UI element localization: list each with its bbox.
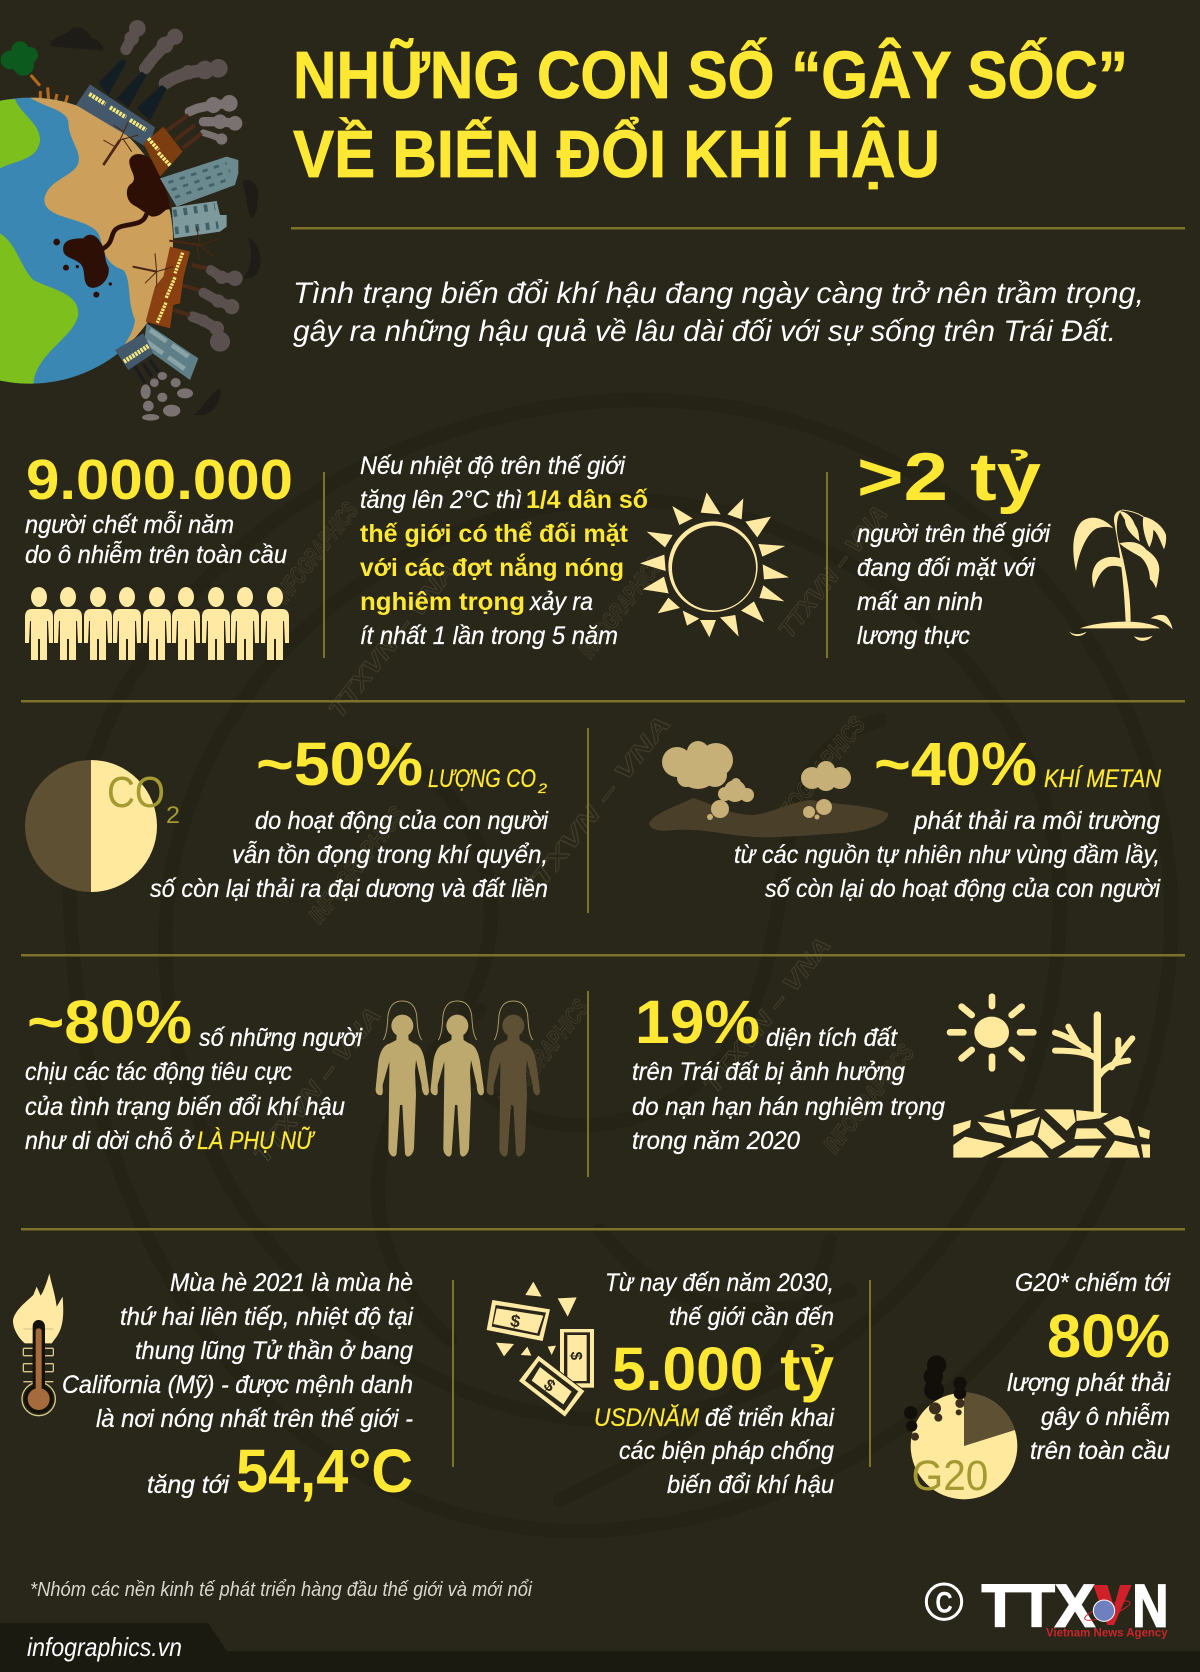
stat: ~80% women: của tình trạng biến đổi khí hậu xyxy=(25,1093,345,1121)
stat: ~80% women xyxy=(25,988,363,1155)
watermarks: INFOGRAPHICS xyxy=(573,553,669,664)
stat: heatwaves xyxy=(360,452,648,650)
stat: 5.000 billion USD: các biện pháp chống xyxy=(619,1437,834,1465)
lower orange factory xyxy=(146,247,190,328)
stat: 9.000.000 deaths: do ô nhiễm trên toàn cầu xyxy=(25,540,287,569)
stat: heatwaves: ít nhất 1 lần trong 5 năm xyxy=(360,622,618,650)
icon: money bills: $ xyxy=(509,1310,522,1332)
stat: ~40% methane xyxy=(734,730,1162,903)
stat: ~50% CO2: số còn lại thải ra đại dương và đất liền xyxy=(150,875,548,903)
stat: >2 billion food insecurity xyxy=(857,439,1051,650)
stat: 5.000 billion USD: Từ nay đến năm 2030, xyxy=(605,1269,834,1297)
stat: heatwaves: nghiêm trọng xyxy=(360,588,525,616)
stat: 9.000.000 deaths: người chết mỗi năm xyxy=(25,510,234,539)
dead trees xyxy=(103,122,220,287)
title xyxy=(293,37,1128,192)
chart: G20 pie with smoke xyxy=(904,1355,1017,1500)
stat: 5.000 billion USD: thế giới cần đến xyxy=(669,1303,834,1331)
stat: 54.4°C Death Valley: thứ hai liên tiếp, nhiệt độ tại xyxy=(120,1303,414,1331)
stat: >2 billion food insecurity: lương thực xyxy=(857,622,970,650)
stat: 5.000 billion USD xyxy=(594,1269,835,1499)
icon: thermometer with flame xyxy=(13,1273,63,1416)
stat: >2 billion food insecurity: đang đối mặt với xyxy=(857,554,1036,582)
earth xyxy=(0,93,187,387)
stat: heatwaves: xảy ra xyxy=(529,588,593,616)
logo: TTXVN: TTX xyxy=(982,1572,1095,1640)
stat: 54.4°C Death Valley: tăng tới xyxy=(147,1471,230,1499)
stat: G20 80%: 80% xyxy=(1047,1302,1170,1370)
grey buildings xyxy=(160,157,238,207)
footer band xyxy=(0,1623,1200,1672)
stat: 5.000 billion USD: biến đổi khí hậu xyxy=(667,1471,834,1499)
chart: CO2 half circle: 2 xyxy=(166,802,180,829)
stat: 19% drought: trong năm 2020 xyxy=(632,1127,800,1155)
source: infographics.vn xyxy=(27,1632,182,1662)
stat: >2 billion food insecurity: >2 tỷ xyxy=(857,439,1041,515)
stat: 19% drought: trên Trái đất bị ảnh hưởng xyxy=(632,1058,905,1086)
stat: 5.000 billion USD: USD/NĂM xyxy=(594,1403,699,1432)
watermarks: TTXVN – VNA xyxy=(698,932,837,1099)
dark clouds xyxy=(50,27,260,415)
watermarks: INFOGRAPHICS xyxy=(268,498,364,609)
stat: 54.4°C Death Valley: 54,4°C xyxy=(236,1437,413,1505)
watermarks: INFOGRAPHICS xyxy=(763,712,871,839)
stat: ~50% CO2: ~50% xyxy=(256,730,423,798)
logo: TTXVN: N xyxy=(1132,1572,1168,1640)
logo: TTXVN: C xyxy=(935,1586,953,1619)
stat: 54.4°C Death Valley: Mùa hè 2021 là mùa hè xyxy=(170,1269,413,1297)
watermarks: TTXVN – VNA xyxy=(248,1002,387,1169)
background swirl decoration xyxy=(70,400,1171,1531)
icon: drought sun, dead tree and cracked earth xyxy=(950,997,1150,1158)
stat: ~40% methane: KHÍ METAN xyxy=(1044,764,1162,793)
top factory xyxy=(76,84,155,148)
watermarks: TTXVN – VNA xyxy=(513,711,676,909)
stat: ~40% methane: từ các nguồn tự nhiên như vùng đầm lầy, xyxy=(734,841,1160,869)
logo: TTXVN: Vietnam News Agency xyxy=(1046,1626,1168,1640)
stat: 19% drought: 19% xyxy=(635,988,760,1056)
watermarks: TTXVN – VNA xyxy=(773,501,893,644)
watermarks: INFOGRAPHICS xyxy=(818,1040,920,1159)
orange factory xyxy=(143,127,183,177)
icon: swamp with methane clouds xyxy=(649,741,888,837)
stat: 9.000.000 deaths: 9.000.000 xyxy=(26,448,293,512)
intro text: gây ra những hậu quả về lâu dài đối với sự sống trên Trái Đất. xyxy=(293,315,1116,348)
icon: polluted globe with factories xyxy=(0,20,260,421)
logo: TTXVN xyxy=(926,1572,1168,1640)
stat: 54.4°C Death Valley: thung lũng Tử thần ở bang xyxy=(135,1337,413,1365)
stat: 54.4°C Death Valley xyxy=(62,1269,414,1505)
stat: 19% drought: diện tích đất xyxy=(766,1024,898,1052)
stat: 9.000.000 deaths xyxy=(25,448,293,569)
title: NHỮNG CON SỐ “GÂY SỐC” xyxy=(293,37,1128,113)
stat: ~80% women: số những người xyxy=(199,1024,363,1052)
smoke xyxy=(126,28,235,342)
stat: heatwaves: 1/4 dân số xyxy=(526,486,648,514)
stat: 5.000 billion USD: để triển khai xyxy=(705,1404,835,1432)
stat: ~40% methane: số còn lại do hoạt động của con người xyxy=(765,875,1161,903)
chimneys xyxy=(98,59,167,121)
icon: money bills xyxy=(487,1282,594,1417)
stat: 19% drought: do nạn hạn hán nghiêm trọng xyxy=(632,1093,945,1121)
stat: 54.4°C Death Valley: là nơi nóng nhất trên thế giới - xyxy=(96,1405,413,1433)
tree xyxy=(31,75,40,86)
watermarks xyxy=(248,498,920,1169)
stat: >2 billion food insecurity: mất an ninh xyxy=(857,588,983,616)
stat: heatwaves: Nếu nhiệt độ trên thế giới xyxy=(360,452,626,480)
stat: ~40% methane: ~40% xyxy=(874,730,1037,798)
watermarks: TTXVN – VNA xyxy=(323,557,462,724)
stat: ~50% CO2: do hoạt động của con người xyxy=(255,807,549,835)
stat: G20 80%: trên toàn cầu xyxy=(1030,1437,1170,1465)
intro text xyxy=(293,277,1144,348)
stat: ~80% women: ~80% xyxy=(27,988,192,1056)
chart: G20 pie with smoke: G20 xyxy=(912,1452,988,1500)
stat: heatwaves: tăng lên 2°C thì xyxy=(360,486,522,514)
stat: ~40% methane: phát thải ra môi trường xyxy=(913,807,1160,835)
chart: CO2 half circle xyxy=(25,760,180,892)
stat: ~50% CO2: LƯỢNG CO xyxy=(428,765,536,793)
icon: nine people xyxy=(25,587,289,660)
stat: ~50% CO2: 2 xyxy=(537,780,547,796)
title: VỀ BIẾN ĐỔI KHÍ HẬU xyxy=(293,117,940,192)
oil spill xyxy=(53,154,170,298)
watermarks: INFOGRAPHICS xyxy=(303,802,411,929)
watermarks: INFOGRAPHICS xyxy=(493,995,595,1114)
footnote: *Nhóm các nền kinh tế phát triển hàng đầu thế giới và mới nổi xyxy=(30,1579,532,1601)
stat: G20 80%: gây ô nhiễm xyxy=(1041,1402,1170,1431)
stat: 54.4°C Death Valley: California (Mỹ) - được mệnh danh xyxy=(62,1371,413,1399)
stat: ~80% women: chịu các tác động tiêu cực xyxy=(25,1058,292,1086)
stat: ~50% CO2: vẫn tồn đọng trong khí quyển, xyxy=(232,840,548,869)
stat: ~80% women: LÀ PHỤ NỮ xyxy=(197,1126,316,1155)
stat: heatwaves: thế giới có thể đối mặt xyxy=(360,520,629,548)
stat: heatwaves: với các đợt nắng nóng xyxy=(360,552,624,582)
stat: ~50% CO2 xyxy=(150,730,549,903)
icon: sun xyxy=(640,492,789,637)
stat: G20 80%: G20* chiếm tới xyxy=(1015,1269,1171,1297)
icon: money bills: $ xyxy=(540,1375,560,1396)
intro text: Tình trạng biến đổi khí hậu đang ngày càng trở nên trầm trọng, xyxy=(293,277,1144,310)
stat: >2 billion food insecurity: người trên thế giới xyxy=(857,520,1051,548)
stat: G20 80% xyxy=(1007,1269,1171,1465)
stat: 19% drought xyxy=(632,988,945,1155)
stat: 5.000 billion USD: 5.000 tỷ xyxy=(612,1335,834,1403)
lower-left buildings xyxy=(143,323,198,380)
icon: three women xyxy=(376,1001,540,1156)
chart: CO2 half circle: CO xyxy=(107,768,165,817)
stat: G20 80%: lượng phát thải xyxy=(1007,1369,1171,1397)
stat: ~80% women: như di dời chỗ ở xyxy=(25,1126,195,1155)
icon: wilted palm xyxy=(1069,510,1173,641)
icon: money bills: $ xyxy=(567,1352,584,1361)
rules xyxy=(21,227,1185,1467)
